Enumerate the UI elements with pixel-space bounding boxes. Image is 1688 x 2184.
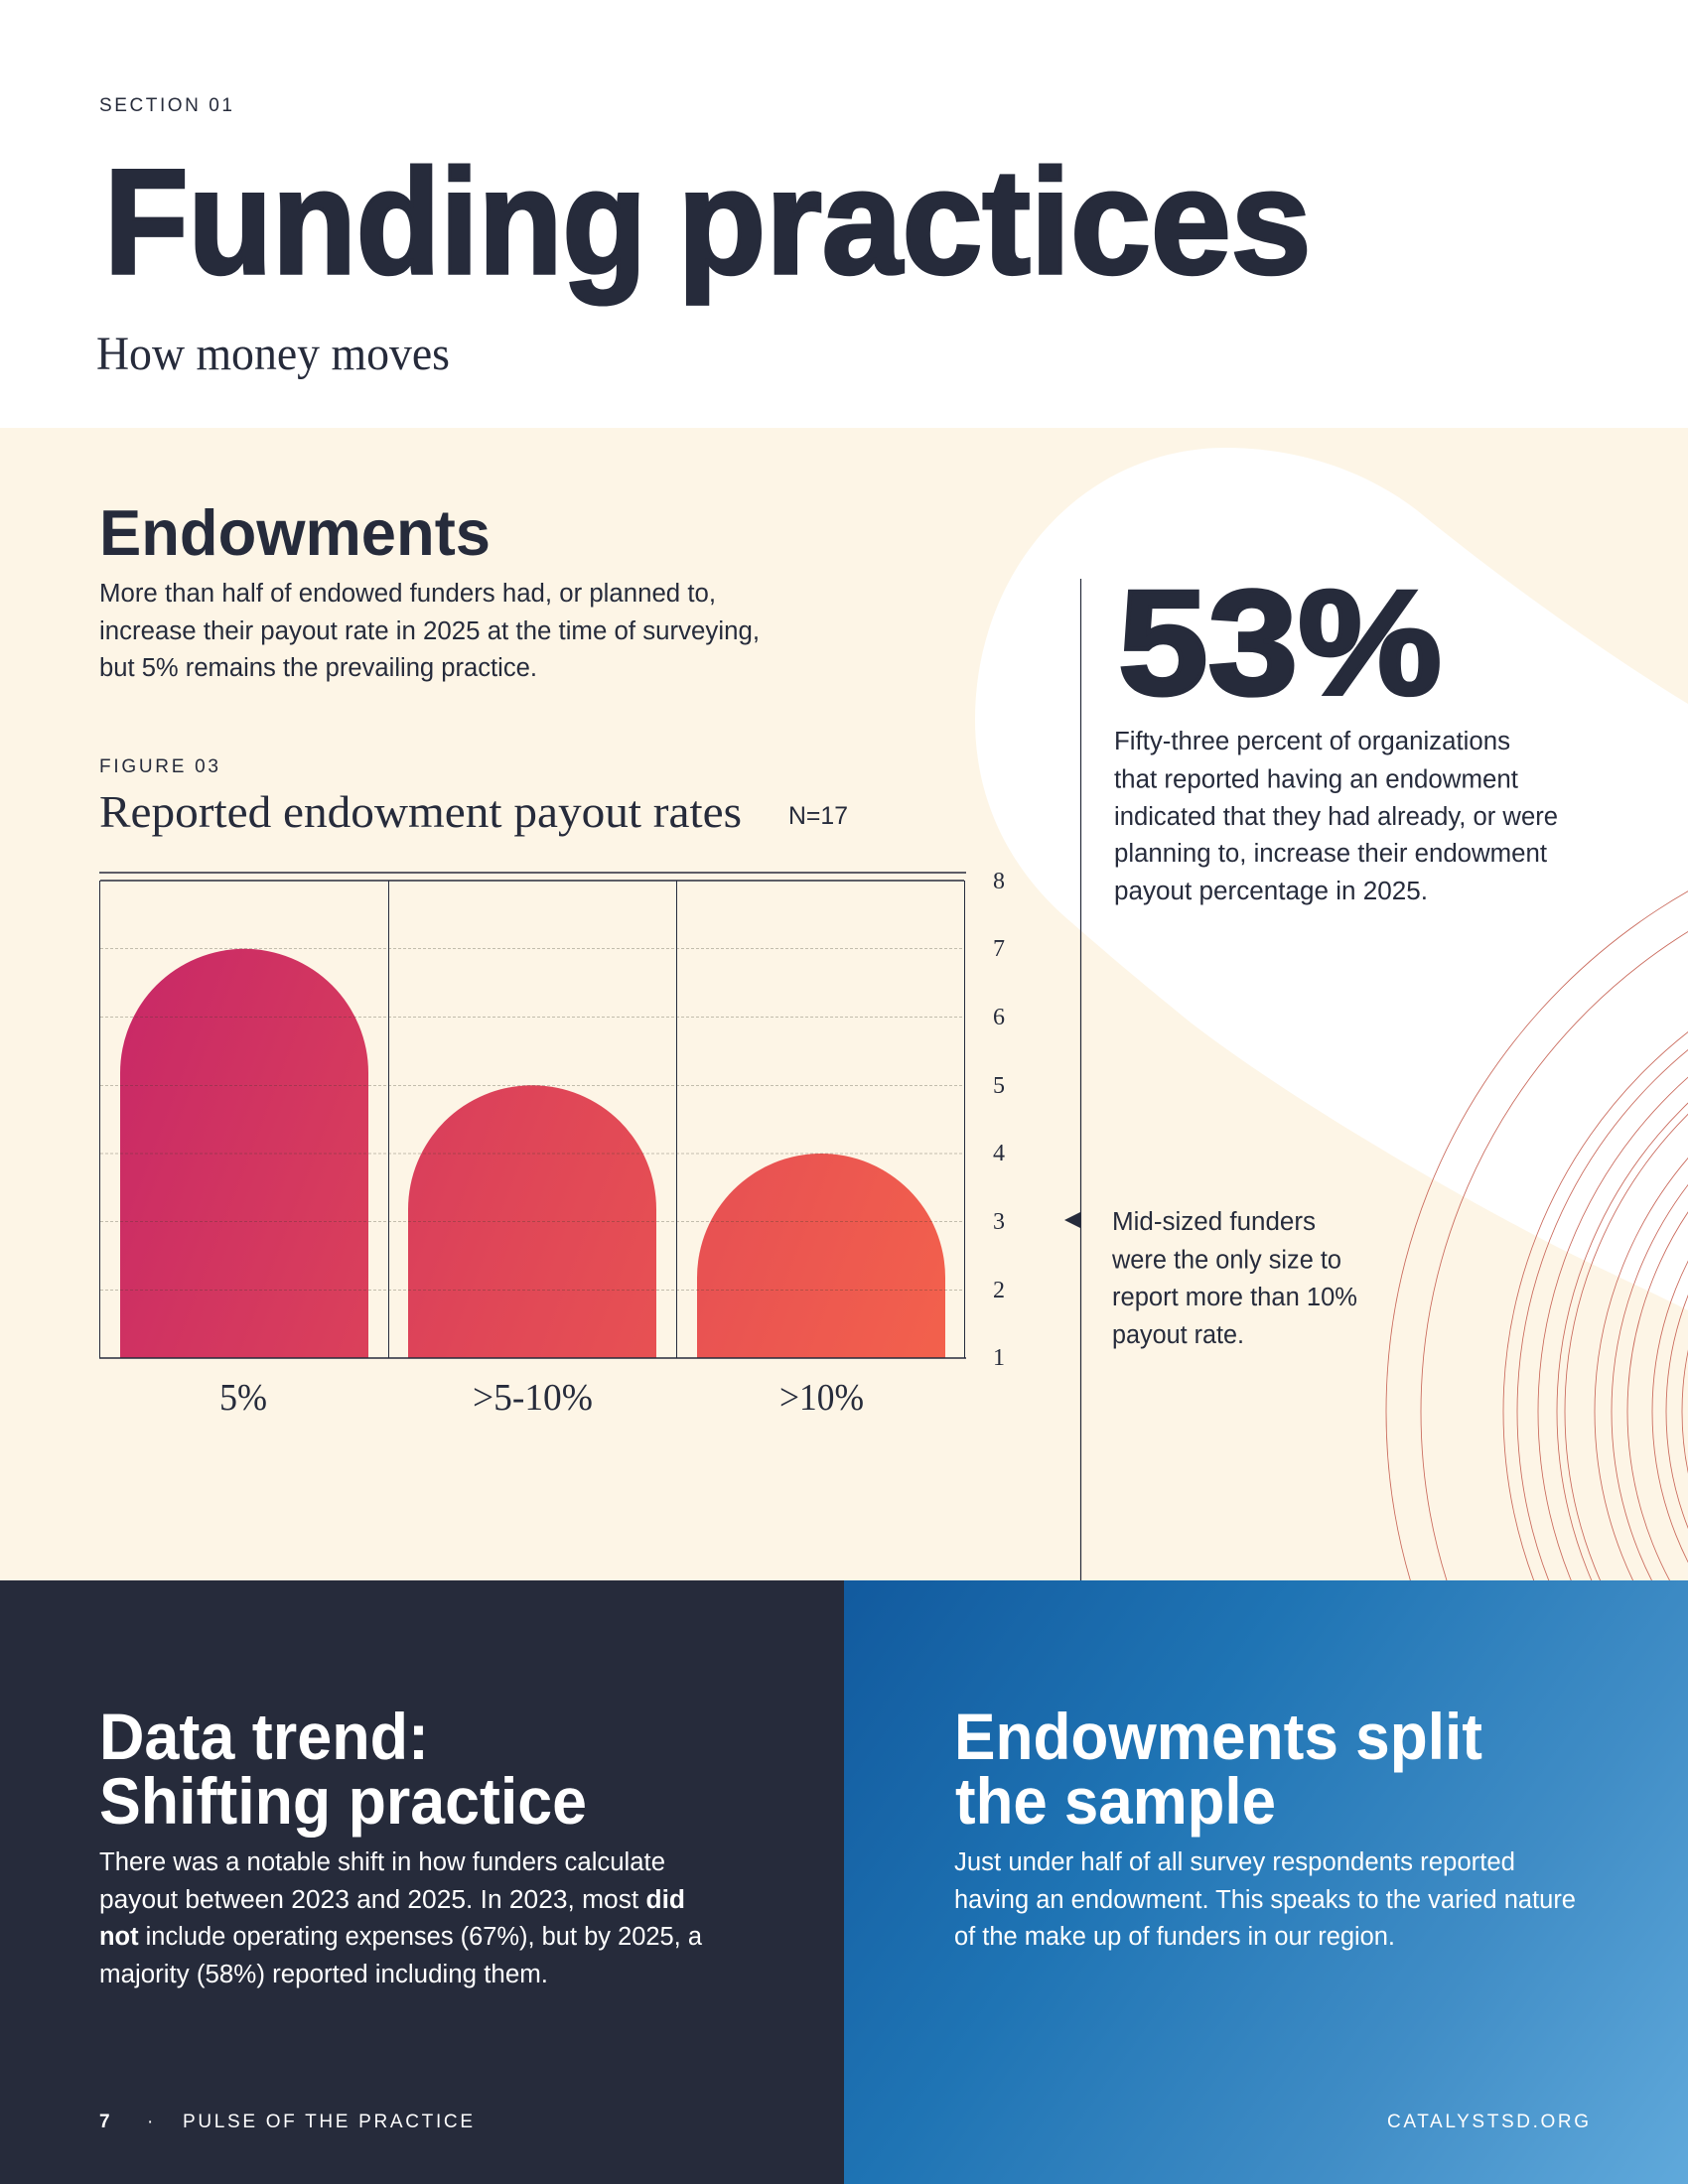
title: practices bbox=[677, 138, 1311, 305]
panel: endowments split the sample bbox=[844, 1580, 1688, 2184]
intro text: increase their payout rate in 2025 at the time of surveying, bbox=[99, 617, 760, 645]
y axis labels: 2 bbox=[993, 1278, 1005, 1303]
stat description: payout percentage in 2025. bbox=[1114, 878, 1428, 905]
footer: publication name: PULSE OF THE PRACTICE bbox=[183, 2112, 473, 2132]
x axis labels: >10% bbox=[779, 1377, 864, 1419]
y axis labels: 1 bbox=[993, 1345, 1005, 1371]
bar: 5% bbox=[120, 949, 368, 1358]
heading: split the sample: the sample bbox=[955, 1764, 1276, 1838]
callout: mid-sized funders: were the only size to bbox=[1111, 1247, 1341, 1275]
heading: endowments: Endowments bbox=[99, 496, 491, 569]
x axis labels: 5% bbox=[219, 1377, 267, 1419]
subtitle: How money moves bbox=[96, 328, 450, 380]
body text: majority (58%) reported including them. bbox=[99, 1961, 548, 1988]
heading: data trend bbox=[99, 1700, 587, 1838]
footer: page number: 7 bbox=[99, 2112, 110, 2132]
x axis labels: >5-10% bbox=[473, 1377, 593, 1419]
footer: website: CATALYSTSD.ORG bbox=[1387, 2112, 1589, 2132]
stat description: that reported having an endowment bbox=[1114, 766, 1518, 794]
intro text bbox=[99, 580, 760, 682]
figure label: FIGURE 03 bbox=[99, 756, 218, 777]
stat description: indicated that they had already, or were bbox=[1114, 803, 1558, 831]
body text: not include operating expenses (67%), but by 2025, a bbox=[99, 1923, 703, 1951]
intro text: More than half of endowed funders had, or planned to, bbox=[99, 580, 716, 608]
heading: data trend: Data trend: bbox=[99, 1700, 429, 1773]
y axis labels bbox=[993, 869, 1005, 1371]
body text bbox=[954, 1848, 1576, 1951]
stat description: Fifty-three percent of organizations bbox=[1114, 728, 1510, 755]
title bbox=[104, 138, 1311, 305]
y axis labels: 7 bbox=[993, 936, 1005, 962]
body text: of the make up of funders in our region. bbox=[954, 1923, 1395, 1951]
title: Funding bbox=[104, 138, 646, 305]
bar: >5-10% bbox=[408, 1085, 656, 1358]
heading: split the sample bbox=[954, 1700, 1482, 1838]
callout: mid-sized funders: report more than 10% bbox=[1112, 1284, 1357, 1311]
body text: having an endowment. This speaks to the varied nature bbox=[954, 1886, 1576, 1914]
y axis labels: 3 bbox=[993, 1209, 1005, 1235]
panel: endowments bbox=[0, 428, 1688, 1580]
callout: mid-sized funders: payout rate. bbox=[1112, 1321, 1244, 1349]
divider line bbox=[1080, 579, 1082, 1580]
section label: SECTION 01 bbox=[99, 95, 232, 116]
y axis labels: 5 bbox=[993, 1073, 1005, 1099]
chart title: Reported endowment payout rates bbox=[99, 786, 742, 837]
y axis labels: 6 bbox=[993, 1005, 1005, 1030]
panel: data trend bbox=[0, 1580, 844, 2184]
stat description: planning to, increase their endowment bbox=[1114, 840, 1547, 868]
body text: There was a notable shift in how funders calculate bbox=[99, 1848, 665, 1876]
y axis labels: 4 bbox=[993, 1141, 1005, 1166]
bar: >10% bbox=[697, 1154, 945, 1358]
stat description bbox=[1114, 728, 1558, 905]
callout: mid-sized funders bbox=[1111, 1208, 1357, 1349]
body text: payout between 2023 and 2025. In 2023, most did bbox=[99, 1886, 685, 1914]
big stat: 53%: 53% bbox=[1118, 559, 1442, 726]
arrow marker bbox=[1064, 1212, 1080, 1228]
y axis labels: 8 bbox=[993, 869, 1005, 894]
intro text: but 5% remains the prevailing practice. bbox=[99, 654, 537, 682]
heading: data trend: Shifting practice bbox=[99, 1764, 587, 1838]
heading: split the sample: Endowments split bbox=[954, 1700, 1482, 1773]
x axis labels bbox=[219, 1377, 864, 1419]
callout: mid-sized funders: Mid-sized funders bbox=[1112, 1208, 1316, 1236]
body text bbox=[99, 1848, 703, 1988]
body text: Just under half of all survey respondents reported bbox=[954, 1848, 1515, 1876]
sample size: N=17 bbox=[788, 802, 848, 830]
footer: separator dot: · bbox=[147, 2112, 153, 2132]
bar chart bbox=[99, 869, 1005, 1419]
